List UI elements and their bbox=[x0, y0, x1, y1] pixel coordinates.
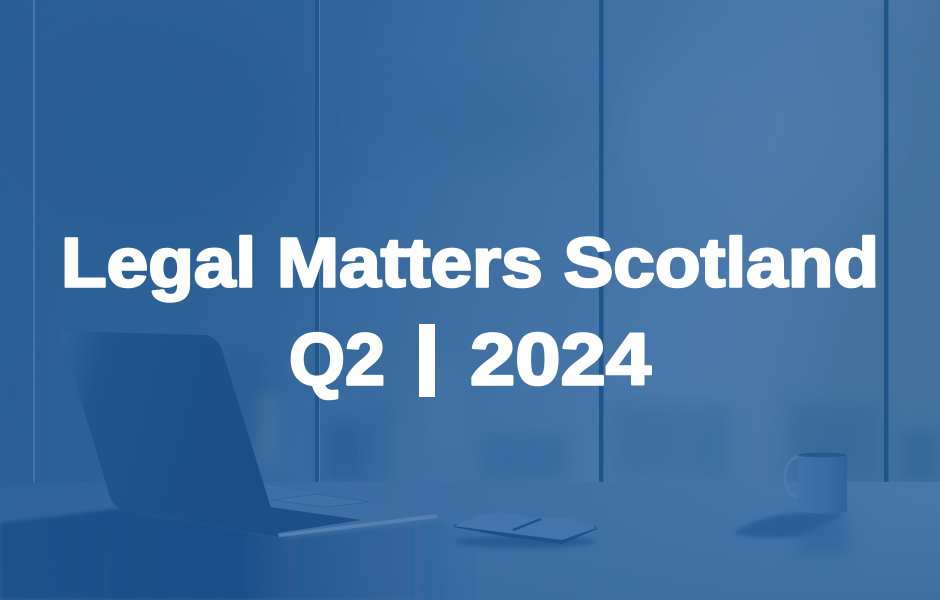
title line 2: quarter: Q2 bbox=[289, 320, 385, 400]
coffee mug bbox=[733, 452, 850, 555]
mug shadow bbox=[733, 513, 847, 538]
mug body bbox=[798, 452, 847, 514]
title line 2: year: 2024 bbox=[470, 320, 651, 400]
window frames bbox=[33, 0, 888, 482]
pencil bbox=[513, 519, 541, 530]
keyboard bbox=[270, 507, 362, 533]
laptop base bbox=[262, 484, 437, 537]
laptop bbox=[60, 331, 437, 537]
trackpad bbox=[272, 494, 370, 507]
title line 1: Legal Matters Scotland bbox=[61, 224, 879, 302]
title line 2: divider bar bbox=[419, 324, 435, 397]
mug handle bbox=[785, 457, 811, 497]
laptop screen bbox=[60, 331, 279, 537]
title bbox=[61, 224, 879, 400]
notebook with pencil bbox=[453, 512, 597, 548]
table surface bbox=[0, 482, 940, 600]
laptop shadow on table bbox=[0, 508, 480, 600]
